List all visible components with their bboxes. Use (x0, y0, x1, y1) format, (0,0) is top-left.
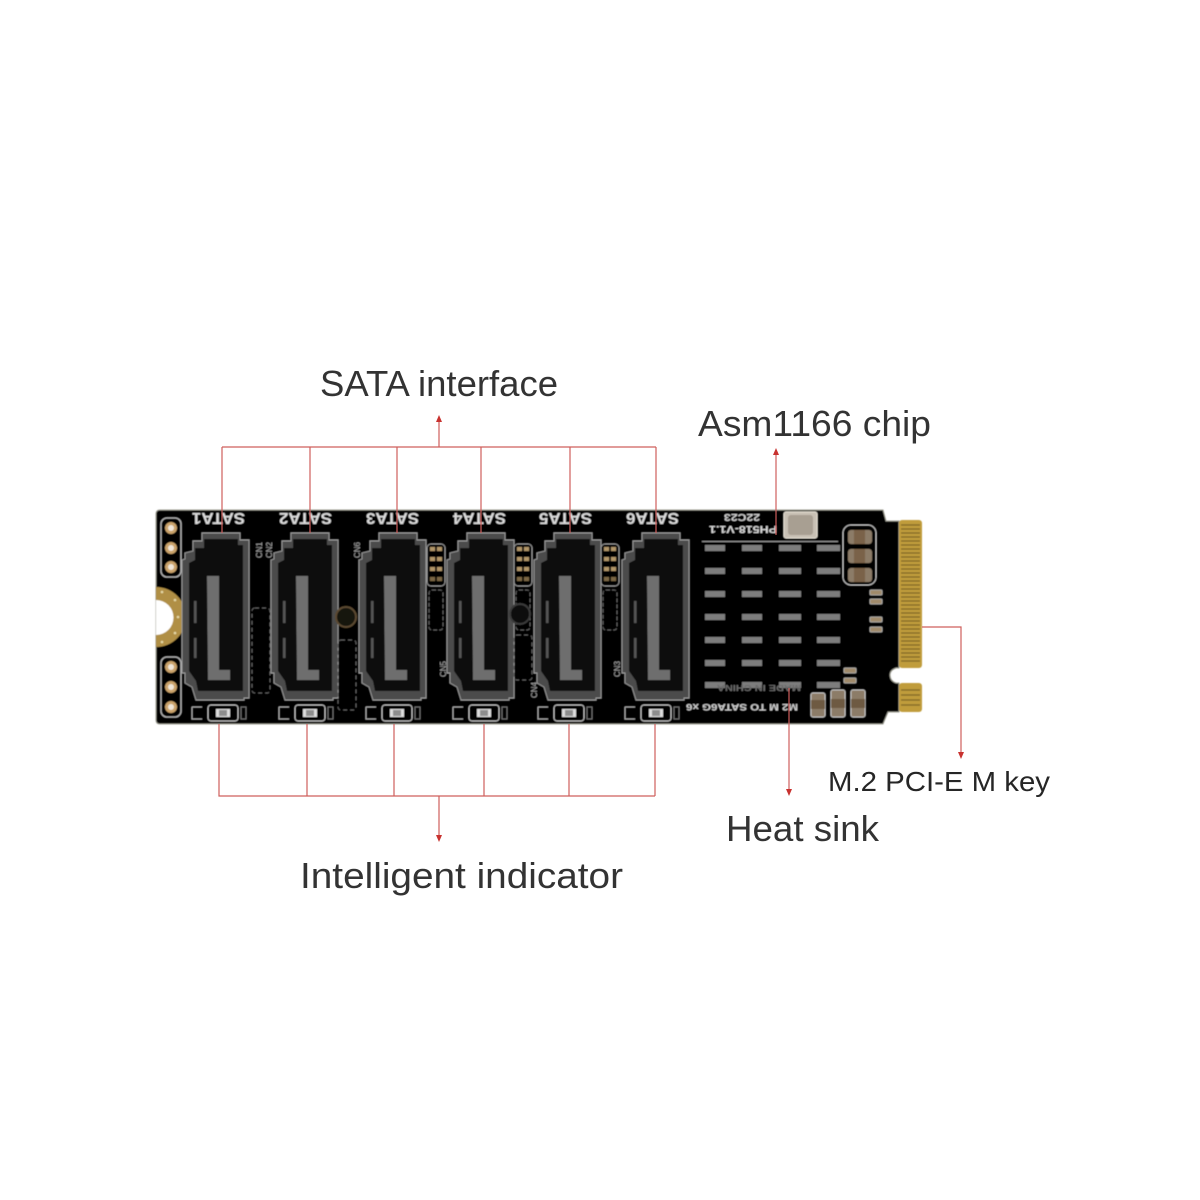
board text (686, 511, 801, 712)
M.2 circuit board (156, 509, 922, 724)
board text: MADE IN CHINA (717, 683, 801, 693)
arrow: up to SATA interface (436, 415, 442, 422)
label: Heat sink: Heat sink (726, 808, 880, 849)
header pads top (161, 518, 181, 577)
label: Intelligent indicator: Intelligent indicator (300, 855, 623, 896)
arrow: down to heat sink label (786, 789, 792, 796)
capacitors top (843, 525, 876, 585)
board text: 22C23 (723, 511, 760, 522)
crystal (784, 512, 817, 538)
arrow: up to chip label (773, 448, 779, 455)
callout line: Asm1166 chip (773, 448, 779, 535)
heat sink (702, 541, 840, 688)
passive components (252, 544, 619, 710)
SATA port silkscreen labels: SATA2 (279, 509, 332, 526)
small silkscreen references: CN3 (613, 660, 622, 677)
small silkscreen references: CN1 (255, 541, 264, 558)
arrow: down to M.2 label (958, 752, 964, 759)
SATA port silkscreen labels: SATA5 (539, 509, 592, 526)
capacitors bottom (811, 690, 865, 717)
gold edge connector (899, 520, 922, 712)
SATA port silkscreen labels: SATA4 (453, 509, 506, 526)
SATA port silkscreen labels: SATA3 (366, 509, 419, 526)
SATA connectors (182, 533, 689, 700)
header pads bottom (161, 657, 181, 717)
small silkscreen references: CN4 (530, 681, 539, 698)
small silkscreen references: CN2 (265, 541, 274, 558)
SATA port silkscreen labels: SATA1 (192, 509, 245, 526)
label: Asm1166 chip: Asm1166 chip (698, 403, 931, 444)
SATA port silkscreen labels: SATA6 (626, 509, 679, 526)
SATA port silkscreen labels (192, 509, 679, 526)
label: M.2 PCI-E M key: M.2 PCI-E M key (828, 766, 1050, 797)
small silkscreen references (255, 541, 622, 698)
label: SATA interface: SATA interface (320, 363, 558, 404)
board text: PH518-V1.1 (709, 523, 777, 535)
callout lines: SATA interface (222, 415, 656, 533)
callout line: Heat sink (786, 688, 792, 796)
mounting hole (156, 587, 186, 647)
arrow: down to Intelligent indicator (436, 835, 442, 842)
callout lines: Intelligent indicator (219, 724, 655, 842)
small silkscreen references: CN6 (353, 541, 362, 558)
indicator LEDs (192, 705, 679, 721)
callout line: M.2 key (922, 627, 964, 759)
board text: M2 M TO SATA6G x6 (686, 701, 798, 712)
board body (156, 510, 899, 724)
small silkscreen references: CN5 (439, 660, 448, 677)
capacitors right (844, 590, 882, 683)
